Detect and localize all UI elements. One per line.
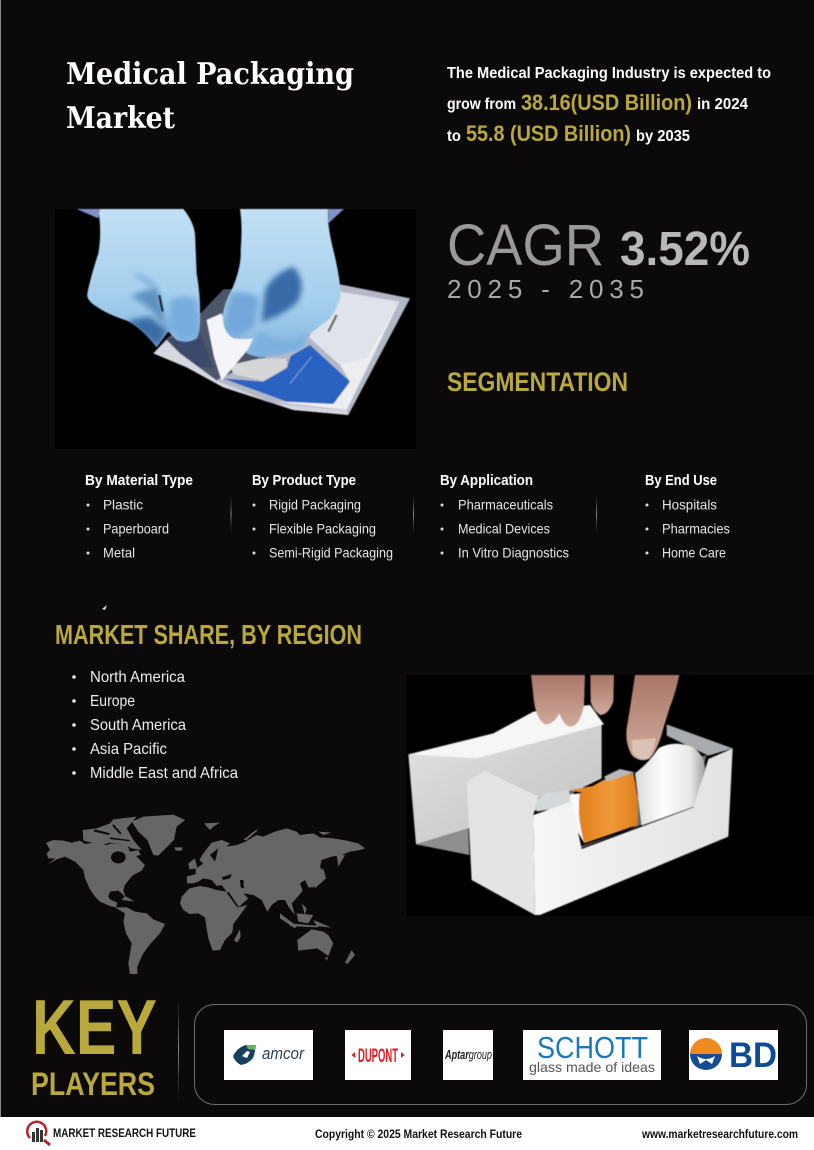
logo: amcor: amcor xyxy=(262,1044,305,1063)
logo: BD: BD xyxy=(729,1036,777,1075)
market forecast text: by 2035 xyxy=(636,128,690,145)
key players heading: PLAYERS xyxy=(31,1066,155,1102)
segment column: application: In Vitro Diagnostics xyxy=(458,544,569,560)
key players heading: KEY xyxy=(32,983,157,1071)
footer: MARKET RESEARCH FUTURE xyxy=(53,1126,196,1140)
logo: AptarGroup xyxy=(443,1030,493,1080)
region list xyxy=(72,669,238,782)
front box xyxy=(467,771,538,915)
market forecast text: grow from xyxy=(447,96,516,113)
region list: Asia Pacific xyxy=(90,741,167,758)
back flap box xyxy=(408,724,602,844)
inhaler xyxy=(537,790,573,812)
CAGR figure xyxy=(447,213,750,304)
inner tray xyxy=(667,724,733,756)
title xyxy=(66,57,354,136)
segment column: application: Medical Devices xyxy=(458,520,550,536)
segment column: product type xyxy=(252,472,393,560)
left glove xyxy=(87,209,341,357)
CAGR figure: CAGR xyxy=(447,213,604,278)
logo: BD xyxy=(689,1030,778,1080)
logo: Schott xyxy=(523,1030,661,1080)
market forecast text: to xyxy=(447,128,461,145)
segment column: material type: Plastic xyxy=(103,496,143,512)
key players heading xyxy=(31,983,157,1102)
footer: Copyright © 2025 Market Research Future xyxy=(315,1127,522,1141)
market forecast text: 38.16(USD Billion) xyxy=(521,90,692,115)
right glove xyxy=(223,209,341,357)
segment column: product type: Flexible Packaging xyxy=(269,520,376,536)
segment column: end use xyxy=(645,472,730,560)
segment column: application: By Application xyxy=(440,472,533,489)
CAGR figure: 3.52% xyxy=(620,223,750,276)
heading: segmentation: SEGMENTATION xyxy=(447,367,628,397)
segment column: application xyxy=(440,472,569,560)
world map xyxy=(46,815,365,974)
logo: amcor xyxy=(224,1030,313,1080)
segment column: end use: Pharmacies xyxy=(662,520,730,536)
segment column: product type: Semi-Rigid Packaging xyxy=(269,544,393,560)
region list: South America xyxy=(90,717,186,734)
segment column: product type: By Product Type xyxy=(252,472,356,489)
icon: market research future logo xyxy=(27,1122,50,1145)
region list: Middle East and Africa xyxy=(90,765,238,782)
title: Market xyxy=(66,101,175,136)
segment column: product type: Rigid Packaging xyxy=(269,496,361,512)
region list: North America xyxy=(90,669,185,686)
segment column: material type xyxy=(85,472,193,560)
key players panel xyxy=(194,1004,806,1104)
segment column: end use: By End Use xyxy=(645,472,717,489)
footer xyxy=(0,1117,814,1150)
title: Medical Packaging xyxy=(66,57,354,92)
logo: DuPont xyxy=(345,1030,411,1080)
CAGR figure: 2025 - 2035 xyxy=(447,274,644,304)
segment column: material type: Paperboard xyxy=(103,520,169,536)
segment column: material type: By Material Type xyxy=(85,472,193,489)
segment column: material type: Metal xyxy=(103,544,135,560)
logo: DuPont: DUPONT xyxy=(358,1046,398,1067)
market forecast text xyxy=(447,65,771,146)
segment column: application: Pharmaceuticals xyxy=(458,496,553,512)
photo: hand lifting inhaler from white box xyxy=(407,675,814,916)
logo: AptarGroup: Aptargroup xyxy=(444,1047,492,1062)
logo: Schott: SCHOTT xyxy=(537,1030,648,1065)
heading: market share by region: MARKET SHARE, BY REGION xyxy=(55,619,362,650)
pouch body xyxy=(153,284,410,415)
logo: Schott: glass made of ideas xyxy=(529,1059,655,1075)
fingers xyxy=(531,675,585,727)
market forecast text: in 2024 xyxy=(697,96,748,113)
market forecast text: The Medical Packaging Industry is expected to xyxy=(447,65,771,82)
market forecast text: 55.8 (USD Billion) xyxy=(466,121,631,146)
segment column: end use: Hospitals xyxy=(662,496,717,512)
photo: gloved hands opening sterile pouch xyxy=(55,209,416,449)
segment column: end use: Home Care xyxy=(662,544,726,560)
region list: Europe xyxy=(90,693,135,710)
